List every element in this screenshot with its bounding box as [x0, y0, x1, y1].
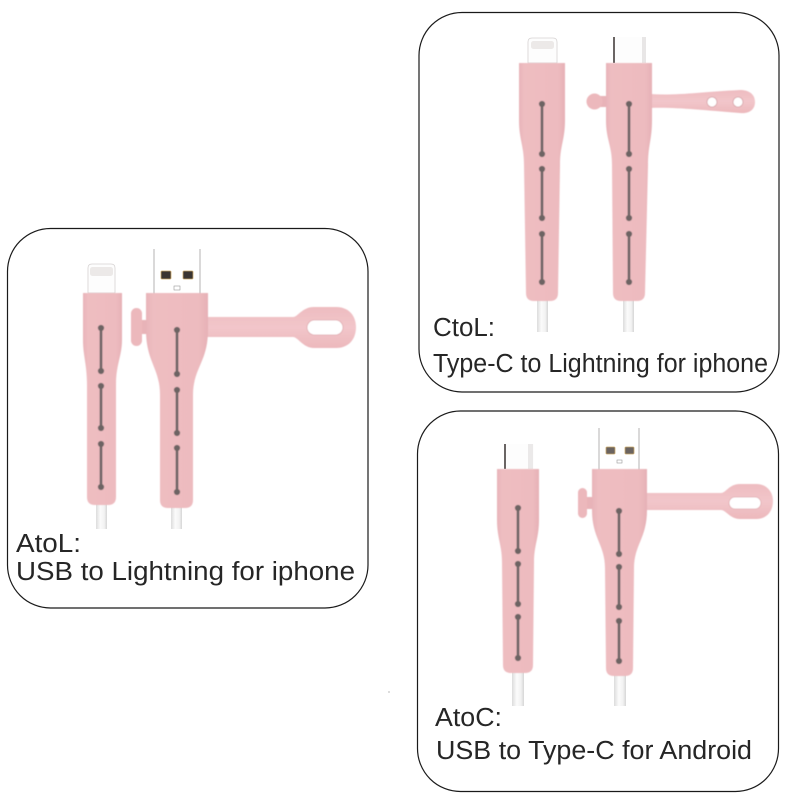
cable: left white cable: [537, 299, 548, 332]
cable: left white cable: [96, 503, 107, 529]
connector: Type-C plug: [613, 37, 646, 63]
label: USB to Lightning for iphone: USB to Lightning for iphone: [16, 558, 355, 586]
nub: peg: [578, 488, 596, 518]
protector: left pink sleeve: [83, 293, 122, 505]
cable: right white cable: [171, 505, 182, 529]
connector: USB-A plug: [599, 428, 639, 470]
label: AtoL: AtoL:: [16, 530, 81, 558]
panel: AtoL USB to Lightning: [8, 228, 368, 608]
protector: right pink sleeve: [606, 63, 652, 301]
cable: left white cable: [512, 671, 524, 706]
nub: peg: [131, 308, 150, 346]
connector: Lightning plug: [88, 264, 115, 293]
strap: looped tether: [645, 484, 773, 519]
label: Type-C to Lightning for iphone: Type-C to Lightning for iphone: [433, 350, 768, 378]
label: AtoC: AtoC:: [435, 704, 502, 732]
protector: right pink sleeve: [146, 293, 208, 508]
strap: tether with two holes: [650, 90, 755, 113]
panel: AtoC USB to Type-C: [418, 411, 778, 792]
nub: peg: [586, 94, 608, 110]
strap: looped tether: [205, 307, 356, 348]
protector: right pink sleeve: [592, 469, 647, 676]
protector: left pink sleeve: [519, 63, 565, 301]
label: CtoL: CtoL:: [433, 314, 495, 342]
panel: CtoL Type-C to Lightning: [419, 12, 779, 392]
label: USB to Type-C for Android: USB to Type-C for Android: [436, 737, 752, 765]
connector: Lightning plug: [528, 38, 557, 63]
connector: Type-C plug: [504, 444, 534, 469]
connector: USB-A plug: [154, 249, 200, 294]
protector: left pink sleeve: [497, 469, 539, 673]
cable: right white cable: [614, 674, 626, 706]
cable: right white cable: [623, 299, 634, 332]
